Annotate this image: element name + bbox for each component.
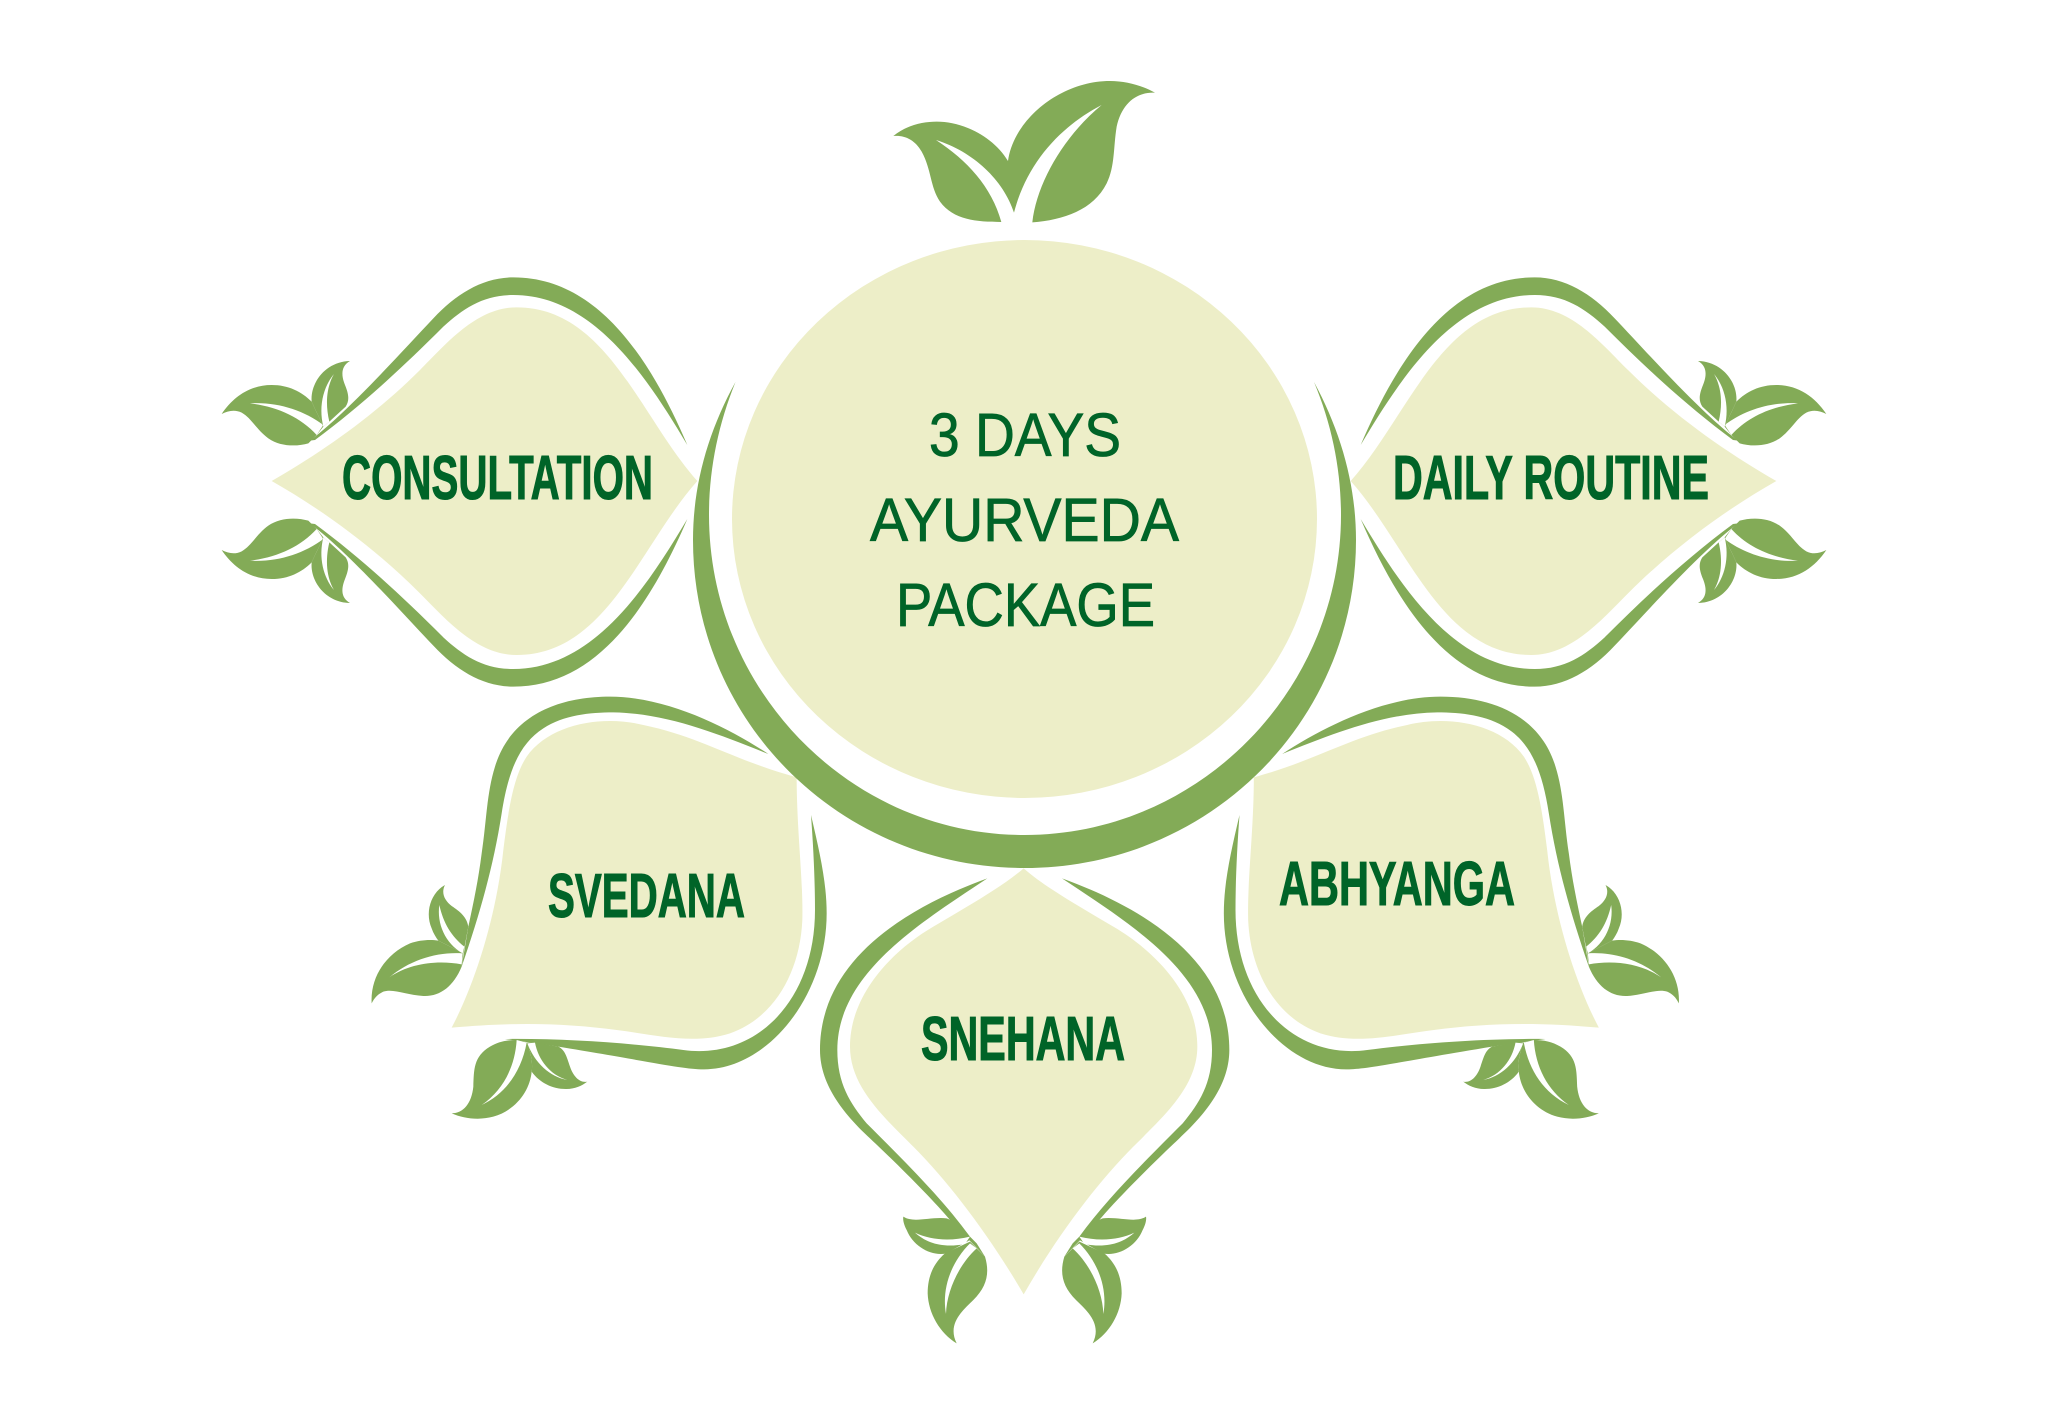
title: 3 days ayurveda package: AYURVEDA	[870, 486, 1179, 554]
central crescent ring	[693, 382, 1356, 868]
panel: abhyanga shape	[1224, 697, 1679, 1119]
panel: svedana shape	[372, 697, 827, 1119]
title: 3 days ayurveda package: 3 DAYS	[929, 401, 1121, 469]
label: daily routine: DAILY ROUTINE	[1393, 444, 1709, 513]
title: 3 days ayurveda package	[870, 401, 1179, 639]
label: snehana: SNEHANA	[921, 1005, 1125, 1074]
panel: daily routine shape	[1351, 277, 1826, 687]
panel: consultation shape	[222, 277, 697, 687]
title: 3 days ayurveda package: PACKAGE	[896, 571, 1155, 639]
label: consultation: CONSULTATION	[342, 444, 653, 513]
label: svedana: SVEDANA	[548, 862, 745, 931]
panel: snehana shape	[820, 868, 1229, 1343]
central pale circle	[732, 240, 1317, 798]
icon: top leaf sprig	[893, 81, 1155, 222]
label: abhyanga: ABHYANGA	[1279, 850, 1515, 919]
